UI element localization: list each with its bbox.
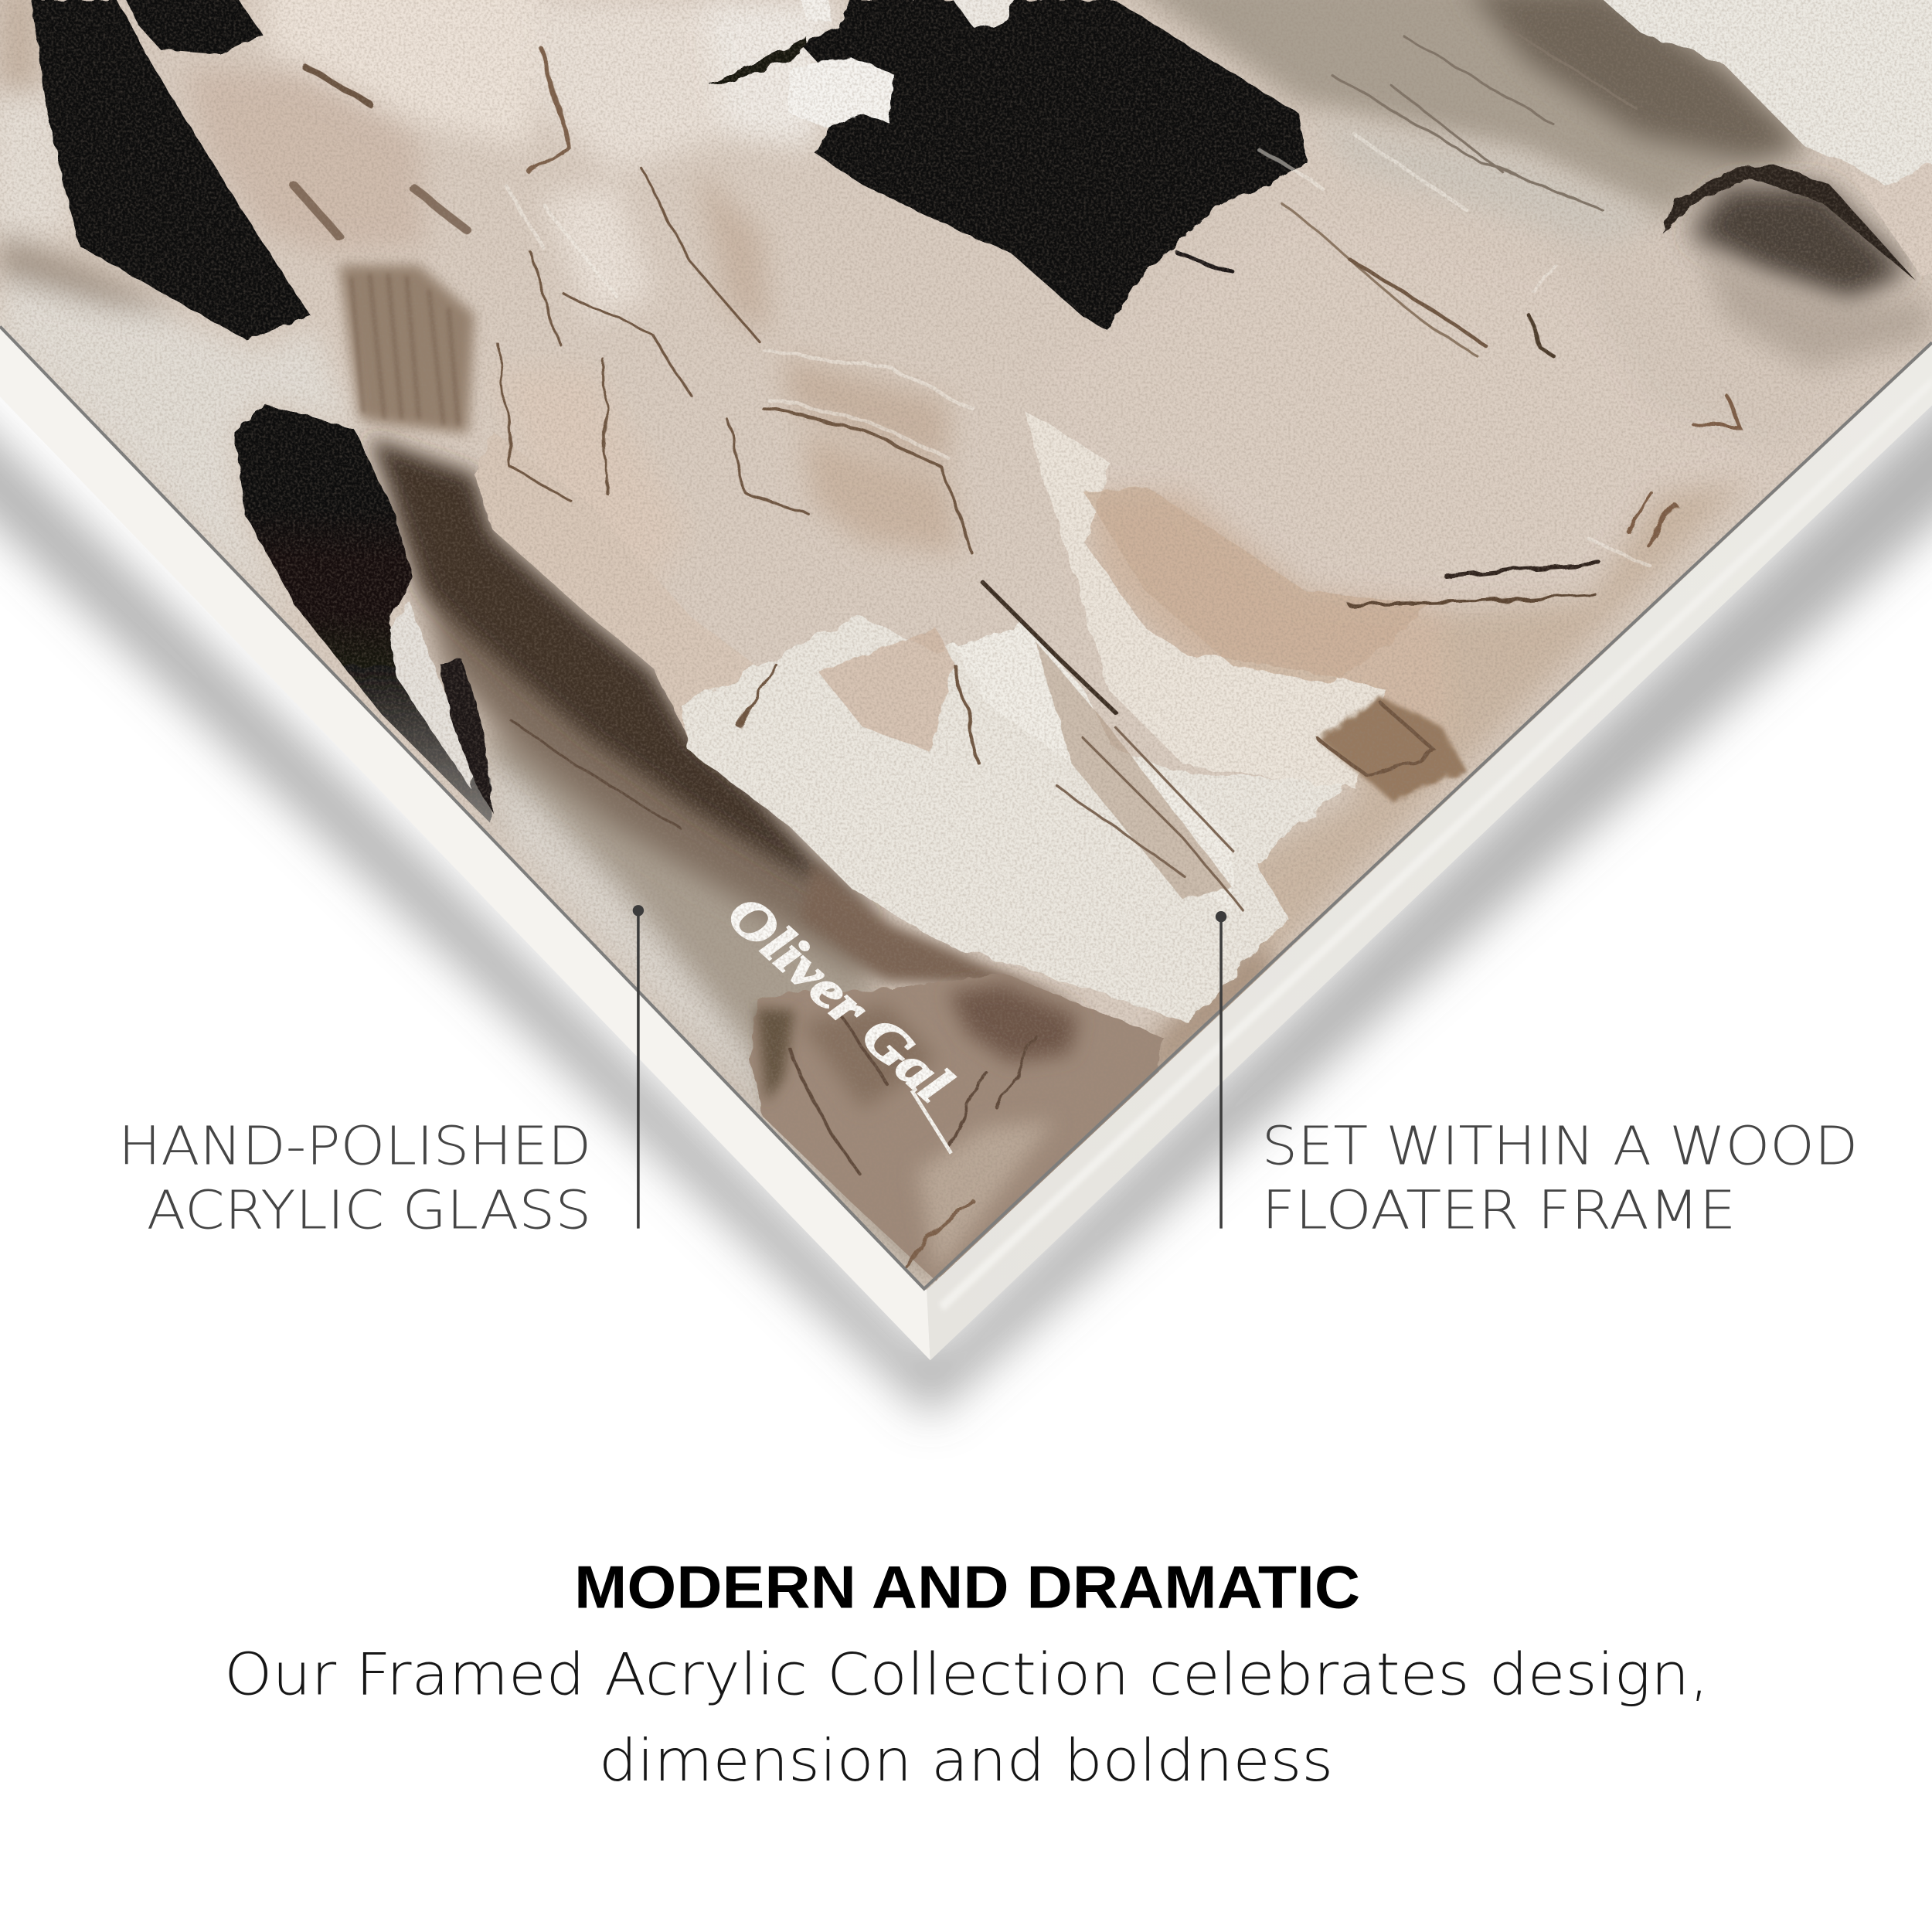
acrylic glass edge [0,327,1932,1289]
heading: MODERN AND DRAMATIC [574,1553,1360,1621]
grey-taupe shaded area below the black paint [1115,0,1932,369]
torn white top-right paint [1590,0,1932,185]
tan scraped strokes [818,487,1466,900]
callout text: FLOATER FRAME [1262,1180,1736,1242]
frame drop shadow [0,332,1932,1417]
beige patch under torn white [1862,162,1932,277]
frame right highlight [939,377,1932,1311]
callout dot [1216,911,1226,922]
callout leader line [638,910,639,1229]
beige torn edge above shadow [474,431,813,788]
signature: Oliver Gal [716,883,963,1114]
soft halo of the brown shadow [394,493,986,974]
canvas texture [0,0,1932,1355]
callout dot [633,905,644,916]
black paint: lower left [234,404,493,823]
dark crescent edge [1662,165,1916,281]
painting: abstract impasto artwork [0,0,1932,1355]
callout text: ACRYLIC GLASS [147,1180,591,1242]
brown crevice lines [296,25,1737,1269]
frame right face [927,345,1932,1360]
callout text: SET WITHIN A WOOD [1262,1116,1858,1178]
white floater frame [0,327,1932,1360]
black paint: upper left [31,0,311,340]
highlights beside ridges [505,135,1651,566]
white palette-knife strokes [680,409,1386,1022]
callout text: HAND-POLISHED [118,1116,591,1178]
streaked brown strip [338,265,474,434]
soft colour fields of paint [0,0,1734,1290]
black paint: upper centre [801,0,1308,330]
callout: wood floater frame [1216,911,1858,1242]
white flecks on black paint [709,0,1016,128]
description text: Our Framed Acrylic Collection celebrates design, [224,1640,1709,1708]
brown tone at band base [801,862,1084,1004]
callout: hand-polished acrylic glass [118,905,644,1242]
frame left face [0,327,930,1360]
callout leader line [1220,916,1222,1229]
lower brown paint mass [750,974,1163,1281]
signature flourish [912,1090,951,1153]
dark brown shadow band [369,437,887,924]
description text: dimension and boldness [599,1726,1333,1794]
